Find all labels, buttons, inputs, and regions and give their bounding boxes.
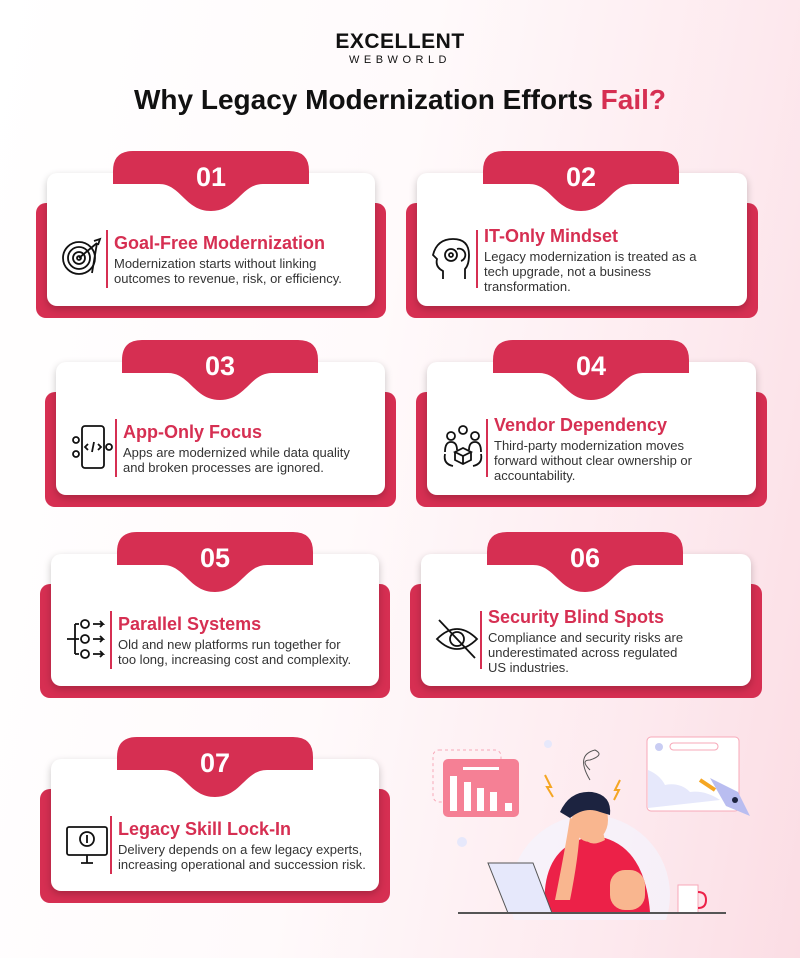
icon: head gear (432, 238, 470, 279)
chart card (433, 750, 519, 817)
text: and broken processes are ignored. (123, 460, 324, 475)
text: Compliance and security risks are (488, 630, 683, 644)
tab 01 (113, 151, 309, 211)
mug (678, 885, 698, 913)
text: 03 (205, 351, 235, 381)
text: tech upgrade, not a business (484, 264, 651, 278)
text: Old and new platforms run together for (118, 637, 341, 652)
text: accountability. (494, 468, 575, 482)
text: Security Blind Spots (488, 606, 664, 626)
logo: EXCELLENT (335, 30, 465, 53)
text: Goal-Free Modernization (114, 233, 325, 253)
text: IT-Only Mindset (484, 226, 618, 246)
icon: phone code (72, 425, 113, 469)
card 07 (40, 737, 390, 903)
text: Modernization starts without linking (114, 256, 316, 271)
text: Vendor Dependency (494, 414, 667, 434)
text: Delivery depends on a few legacy experts, (118, 842, 362, 857)
text: 06 (570, 543, 600, 573)
title: Why Legacy Modernization Efforts Fail? (134, 84, 666, 115)
card 05 (40, 532, 390, 698)
illustration: stressed man at laptop (432, 736, 750, 920)
text: App-Only Focus (123, 422, 262, 442)
text: too long, increasing cost and complexity. (118, 652, 351, 667)
icon: target (62, 238, 102, 275)
text: Legacy modernization is treated as a (484, 248, 696, 264)
bolts and scribble (545, 775, 553, 797)
desk (458, 912, 726, 914)
person (510, 815, 670, 958)
laptop (488, 863, 552, 913)
browser rocket (647, 737, 750, 816)
text: underestimated across regulated (488, 644, 677, 660)
card 01 (36, 151, 386, 318)
text: Parallel Systems (118, 614, 261, 634)
text: Legacy Skill Lock-In (118, 819, 291, 839)
card 06 (410, 532, 762, 698)
icon: eye crossed (436, 619, 478, 659)
text: 07 (200, 748, 230, 778)
text: forward without clear ownership or (494, 452, 692, 468)
text: 04 (576, 351, 606, 381)
text: 01 (196, 162, 226, 192)
text: 02 (566, 162, 596, 192)
card 04 (416, 340, 767, 507)
text: 05 (200, 543, 230, 573)
text: Third-party modernization moves (494, 438, 684, 452)
logo (335, 30, 465, 66)
text: outcomes to revenue, risk, or efficiency. (114, 271, 342, 286)
text: transformation. (484, 278, 571, 294)
card 02 (406, 151, 758, 318)
card 03 (45, 340, 396, 507)
text: Apps are modernized while data quality (123, 445, 350, 460)
icon: parallel gears (67, 619, 106, 659)
icon: monitor lock (66, 826, 108, 864)
text: increasing operational and succession risk. (118, 857, 366, 872)
icon: team cubes (444, 425, 482, 467)
logo: WEBWORLD (349, 54, 451, 66)
text: US industries. (488, 660, 569, 674)
